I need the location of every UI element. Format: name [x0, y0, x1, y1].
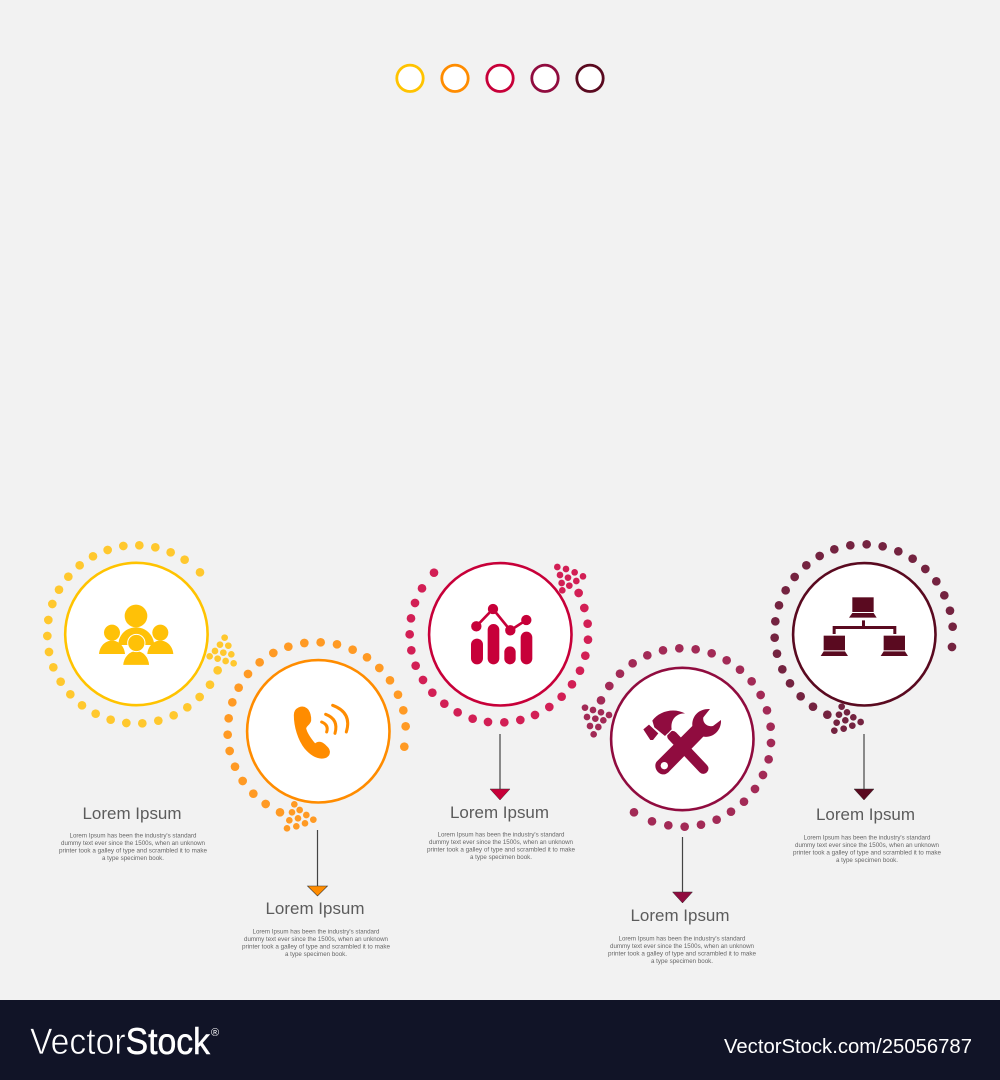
arrow 2 — [308, 830, 328, 896]
icon: hammer and wrench — [643, 709, 721, 774]
arrow 3 — [490, 734, 510, 800]
icon: telephone with signal — [294, 705, 348, 758]
body text 1: printer took a galley of type and scrambled it to make — [59, 848, 207, 854]
body text 2: dummy text ever since the 1500s, when an unknown — [244, 936, 388, 943]
dotted ring 1 — [43, 541, 237, 728]
arrow 4 — [672, 837, 692, 903]
body text 1: Lorem Ipsum has been the industry's standard — [70, 832, 197, 840]
body text 5: printer took a galley of type and scrambled it to make — [793, 850, 941, 856]
icon: bar and line chart — [471, 604, 532, 664]
panel: step 5 network — [770, 540, 957, 864]
body text 5: dummy text ever since the 1500s, when an unknown — [795, 842, 939, 849]
body text 3: Lorem Ipsum has been the industry's standard — [438, 832, 565, 838]
dotted ring 2 — [223, 638, 410, 832]
registered mark: ® — [211, 1027, 219, 1039]
main circle 5 — [793, 563, 936, 706]
dotted ring 4 — [582, 644, 775, 831]
heading 1: Lorem Ipsum — [82, 804, 182, 823]
icon: laptop network — [821, 597, 908, 656]
body text 5 — [793, 834, 941, 864]
body text 1 — [59, 832, 207, 862]
panel: step 2 phone — [223, 638, 410, 958]
body text 3: a type specimen book. — [470, 854, 532, 861]
main circle 2 — [247, 660, 390, 802]
main circle 3 — [429, 563, 572, 706]
body text 1: dummy text ever since the 1500s, when an unknown — [61, 840, 205, 847]
body text 3: dummy text ever since the 1500s, when an unknown — [429, 839, 573, 846]
footer logo: VectorStock — [30, 1021, 210, 1062]
heading 4: Lorem Ipsum — [630, 906, 730, 925]
heading 2: Lorem Ipsum — [266, 899, 364, 918]
footer image id: VectorStock.com/25056787 — [724, 1036, 972, 1058]
body text 4: Lorem Ipsum has been the industry's standard — [618, 936, 746, 942]
body text 4: a type specimen book. — [651, 958, 713, 965]
arrow 5 — [854, 734, 874, 800]
main circle 1 — [65, 563, 208, 705]
body text 5: a type specimen book. — [836, 857, 898, 864]
body text 2: a type specimen book. — [285, 951, 347, 958]
dotted ring 3 — [405, 564, 592, 727]
dotted ring 5 — [770, 540, 957, 734]
body text 2: printer took a galley of type and scrambled it to make — [242, 944, 390, 950]
body text 2 — [242, 928, 390, 958]
main circle 4 — [611, 668, 754, 810]
body text 3 — [427, 832, 575, 861]
panel: step 3 chart — [405, 563, 592, 861]
icon: group of people — [99, 605, 173, 665]
panel: step 1 people — [43, 541, 237, 862]
heading 3: Lorem Ipsum — [450, 803, 549, 822]
body text 4: dummy text ever since the 1500s, when an unknown — [610, 943, 754, 950]
body text 1: a type specimen book. — [102, 855, 164, 862]
body text 4 — [608, 936, 756, 965]
heading 5: Lorem Ipsum — [816, 805, 915, 824]
body text 2: Lorem Ipsum has been the industry's standard — [252, 928, 380, 936]
legend: five ring markers — [397, 65, 603, 92]
body text 3: printer took a galley of type and scrambled it to make — [427, 846, 575, 854]
body text 4: printer took a galley of type and scrambled it to make — [608, 950, 756, 958]
footer bar — [0, 1000, 1000, 1080]
panel: step 4 tools — [582, 644, 775, 965]
body text 5: Lorem Ipsum has been the industry's standard — [804, 834, 931, 842]
